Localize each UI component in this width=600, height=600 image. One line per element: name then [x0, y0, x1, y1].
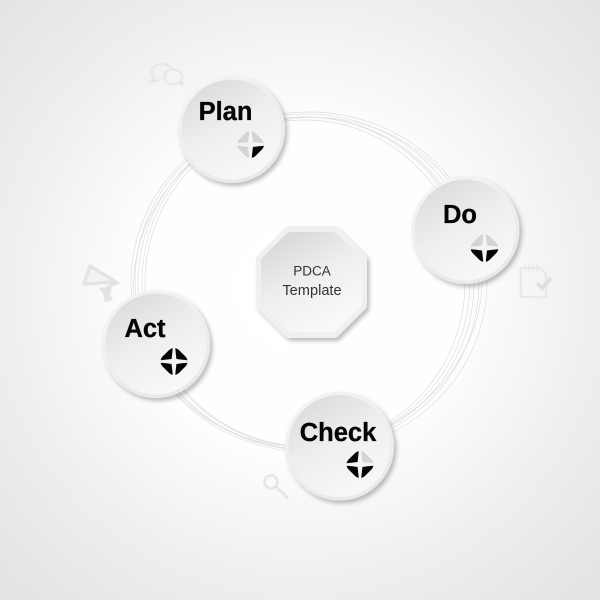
circle: Plan	[178, 76, 285, 183]
label: Do: Do	[443, 201, 477, 229]
label: Plan: Plan	[199, 98, 252, 126]
icon: Act quadrants	[161, 348, 187, 375]
icon: Plan quadrants	[237, 131, 264, 158]
circle: Do	[412, 176, 520, 284]
icon: megaphone	[84, 266, 120, 302]
circle: Act	[102, 290, 210, 398]
center text: PDCA	[293, 264, 331, 278]
center octagon: PDCA Template	[264, 234, 359, 330]
label: Check: Check	[300, 419, 377, 447]
center octagon: PDCA Template: Template	[282, 283, 342, 299]
circle: Check	[285, 392, 394, 500]
icon: chat bubbles	[151, 64, 183, 85]
icon: Do quadrants	[471, 234, 498, 262]
icon: notepad	[521, 264, 551, 297]
label: Act: Act	[124, 315, 166, 343]
icon: magnifier	[264, 476, 288, 498]
cycle ring lines	[99, 81, 517, 483]
icon: Check quadrants	[347, 451, 373, 478]
